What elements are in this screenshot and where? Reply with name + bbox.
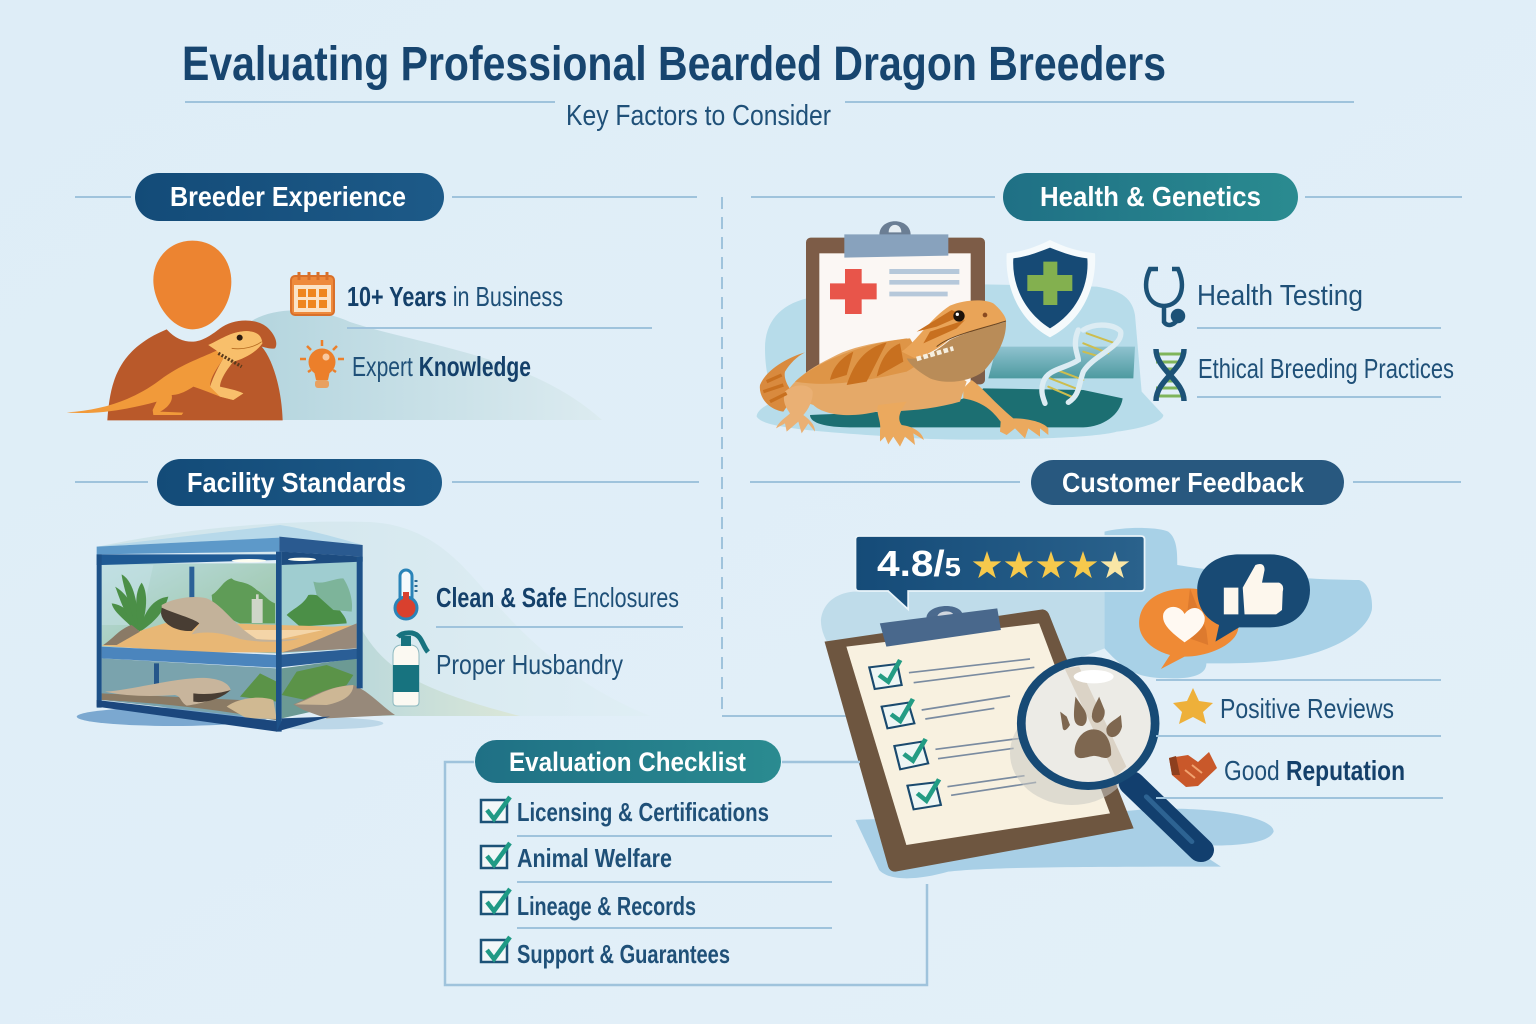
text: clean and safe enclosures: Clean & Safe Enclosures [436,582,679,613]
subtitle: Key Factors to Consider [566,100,831,132]
icon: shield [1006,240,1095,337]
icon: light bulb [300,340,344,388]
icon: star [1173,688,1213,724]
text: positive reviews: Positive Reviews [1220,693,1394,724]
icon: handshake [1169,752,1217,787]
illustration: health scene with bearded dragon [757,221,1163,447]
item: lineage and records [481,889,696,921]
item: support and guarantees [481,937,730,969]
background blobs [757,284,1163,440]
rating stars [973,551,1129,578]
panel: facility standards [77,459,683,732]
item: animal welfare: Animal Welfare [517,843,672,873]
icon: stethoscope [1146,269,1183,325]
upper lizard [161,597,300,642]
icon: thermometer [395,570,417,619]
heading: customer feedback [1031,460,1344,505]
text: expert knowledge: Expert Knowledge [352,351,531,382]
item: support and guarantees: Support & Guarantees [517,939,730,969]
frame [97,525,363,732]
item: lineage and records: Lineage & Records [517,891,696,921]
panel: evaluation checklist [445,740,927,985]
clipboard [825,606,1134,872]
illustration: terrarium [77,525,395,732]
sand and rock [102,622,357,652]
background hill [96,522,650,716]
heading: breeder experience [135,173,444,221]
icon: dna [1042,325,1121,403]
checklist frame [445,762,927,985]
rating badge shape [855,536,1145,609]
icon: clipboard [806,221,985,387]
background hill [250,310,602,420]
heading: evaluation checklist: Evaluation Checklist [509,747,746,777]
lower scene [102,665,395,720]
illustration: feedback scene [821,528,1372,878]
icon: person with lizard [67,241,283,420]
icon: calendar [291,272,334,315]
icon: dna helix [1156,349,1184,401]
text: good reputation: Good Reputation [1224,755,1405,786]
panel: breeder experience [67,173,652,420]
text: 10+ years in business: 10+ Years in Business [347,281,563,312]
background hill lower [362,630,640,716]
icon: spray bottle [393,633,428,706]
plants upper [112,574,352,632]
text: ethical breeding practices: Ethical Breeding Practices [1198,353,1454,384]
icon: thumbs up bubble [1197,554,1310,642]
magnifying glass [1010,661,1201,850]
title: Evaluating Professional Bearded Dragon Breeders [182,38,1166,91]
item: animal welfare [481,843,672,873]
heading: health and genetics: Health & Genetics [1040,181,1261,212]
heading: facility standards [157,459,442,506]
heading: breeder experience: Breeder Experience [170,181,406,212]
heading: customer feedback: Customer Feedback [1062,467,1304,498]
rating value: 4.8/ 5 [877,543,961,584]
background blobs [821,528,1372,878]
heading: health and genetics [1003,173,1298,221]
illustration: bearded dragon [760,300,1048,447]
heading: facility standards: Facility Standards [187,467,406,498]
text: health testing: Health Testing [1197,280,1363,312]
item: licensing and certifications: Licensing & Certifications [517,797,769,827]
icon: heart bubble [1139,588,1238,669]
heading: evaluation checklist [475,740,781,783]
text: proper husbandry: Proper Husbandry [436,649,623,680]
panel: customer feedback [821,460,1443,878]
panel: health and genetics [757,173,1454,447]
